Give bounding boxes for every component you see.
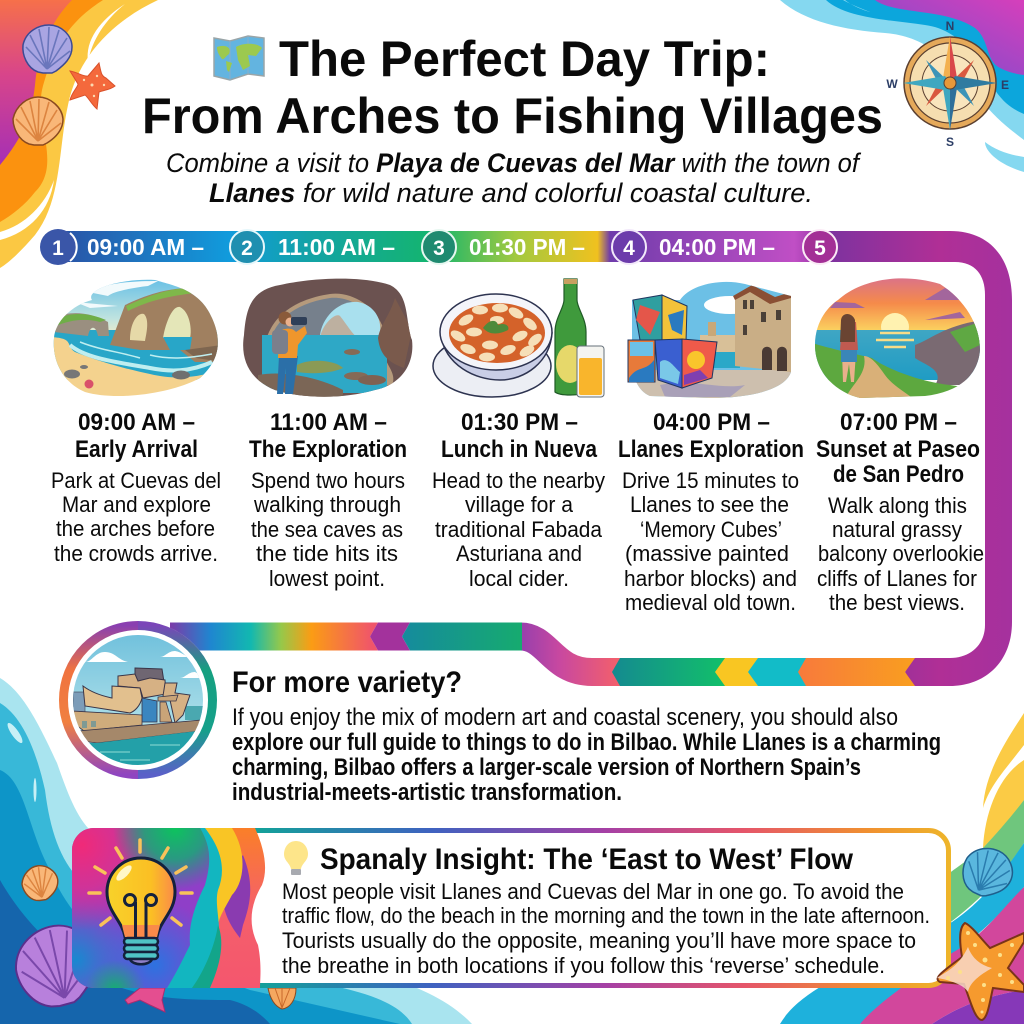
- step 4 text: Llanes to see the: [630, 492, 789, 517]
- step 3 text: Head to the nearby: [432, 468, 605, 493]
- step 4 text: medieval old town.: [625, 590, 796, 615]
- illustration: beach arches: [54, 280, 218, 396]
- step 1 marker and time: [40, 229, 204, 265]
- icon: world map: [214, 36, 264, 80]
- step 4 marker and time: 4: [623, 237, 635, 260]
- bulb: [89, 840, 192, 964]
- step 1 text: the arches before: [56, 516, 215, 541]
- step 1 text: Mar and explore: [62, 492, 211, 517]
- step 5 text: Walk along this: [828, 493, 967, 518]
- step 1 text: the crowds arrive.: [54, 541, 218, 566]
- icon: compass: N: [946, 19, 954, 33]
- step 2 text: lowest point.: [269, 566, 385, 591]
- insight body: the breathe in both locations if you follow this ‘reverse’ schedule.: [282, 953, 885, 978]
- text block: variety body: [232, 704, 941, 806]
- text block: variety body: If you enjoy the mix of modern art and coastal scenery, you should also: [232, 704, 898, 731]
- icon: small lightbulb: [284, 841, 308, 875]
- icon: purple seashell: [23, 25, 72, 73]
- heading: for more variety: For more variety?: [232, 666, 462, 699]
- step 4 text: (massive painted: [625, 541, 789, 566]
- step 2 text: The Exploration: [249, 436, 407, 463]
- step 5 text: natural grassy: [832, 517, 962, 542]
- icon: orange seashell: [13, 97, 63, 145]
- step 2 text: 11:00 AM –: [270, 409, 387, 436]
- step 4 text: Drive 15 minutes to: [622, 468, 799, 493]
- step 5 text: Sunset at Paseo: [816, 436, 980, 463]
- icon: compass: W: [886, 77, 898, 91]
- step 4 marker and time: 04:00 PM –: [659, 234, 775, 260]
- step 3 text: traditional Fabada: [435, 517, 603, 542]
- top-left wave decoration: [0, 0, 158, 268]
- step 2 text: the tide hits its: [256, 541, 398, 566]
- icon: large orange starfish: [937, 923, 1024, 1020]
- step 1 text: Early Arrival: [75, 436, 198, 463]
- bottom-left wave decoration: [0, 678, 472, 1024]
- subtitle: Combine a visit to Playa de Cuevas del Mar with the town of: [166, 148, 861, 178]
- bottom-right wave decoration: [780, 713, 1024, 1024]
- step 2 text: the sea caves as: [251, 517, 403, 542]
- step 5 text: balcony overlookie: [818, 541, 984, 566]
- step 4 text: [618, 409, 804, 615]
- icon: red starfish: [70, 63, 115, 109]
- step 2 marker and time: 2: [241, 237, 253, 260]
- icon: small bottom seashell: [268, 988, 296, 1009]
- step 2 marker and time: 11:00 AM –: [278, 234, 395, 260]
- subtitle: [166, 148, 861, 208]
- illustration: Bilbao museum in ring: [59, 621, 217, 779]
- title: The Perfect Day Trip:: [279, 31, 770, 87]
- step 1 marker and time: 09:00 AM –: [87, 234, 204, 260]
- insight body: traffic flow, do the beach in the morning and the town in the late afternoon.: [282, 903, 930, 928]
- step 4 text: harbor blocks) and: [624, 566, 797, 591]
- illustration: sea cave with photographer: [243, 278, 412, 397]
- step 1 text: [51, 409, 221, 566]
- step 4 text: ‘Memory Cubes’: [640, 517, 782, 542]
- step 5 text: the best views.: [829, 590, 965, 615]
- icon: compass: S: [946, 135, 954, 149]
- insight body: [282, 879, 930, 978]
- step 5 text: de San Pedro: [833, 461, 964, 488]
- illustration: sunset at the cliffs: [812, 275, 984, 400]
- illustration: painted memory cubes and old town: [628, 278, 795, 400]
- text block: variety body: charming, Bilbao offers a larger-scale version of Northern Spain’s: [232, 754, 861, 781]
- step 2 marker and time: [230, 230, 395, 264]
- insight heading: Spanaly Insight: The ‘East to West’ Flow: [320, 843, 854, 876]
- step 3 text: Lunch in Nueva: [441, 436, 598, 463]
- step 3 text: local cider.: [469, 566, 569, 591]
- top-right wave decoration: [780, 0, 1024, 172]
- icon: small orange seashell: [20, 863, 60, 903]
- icon panel: lightbulb: [72, 828, 265, 988]
- step 5 marker: 5: [814, 237, 826, 260]
- step 2 text: [249, 409, 407, 591]
- step 3 text: Asturiana and: [456, 541, 582, 566]
- step 5 marker: [803, 230, 837, 264]
- step 4 marker and time: [612, 230, 775, 264]
- insight body: Most people visit Llanes and Cuevas del Mar in one go. To avoid the: [282, 879, 904, 904]
- title: [142, 31, 883, 144]
- step 1 text: Park at Cuevas del: [51, 468, 221, 493]
- step 5 text: 07:00 PM –: [840, 409, 957, 436]
- step 3 marker and time: [422, 230, 585, 264]
- step 5 text: [816, 409, 984, 615]
- insight body: Tourists usually do the opposite, meaning you’ll have more space to: [282, 928, 916, 953]
- step 3 text: village for a: [465, 492, 574, 517]
- step 2 text: walking through: [253, 492, 401, 517]
- panel: Spanaly insight: [72, 828, 948, 988]
- step 1 marker and time: 1: [52, 237, 64, 260]
- step 3 text: 01:30 PM –: [461, 409, 578, 436]
- icon: blue seashell: [955, 840, 1020, 904]
- step 4 text: Llanes Exploration: [618, 436, 804, 463]
- icon: pink starfish: [125, 988, 165, 1012]
- step 2 text: Spend two hours: [251, 468, 405, 493]
- step 1 text: 09:00 AM –: [78, 409, 195, 436]
- icon: compass: [886, 19, 1009, 149]
- timeline track: [58, 231, 1012, 686]
- step 5 text: cliffs of Llanes for: [817, 566, 977, 591]
- title: From Arches to Fishing Villages: [142, 88, 883, 144]
- text block: variety body: industrial-meets-artistic transformation.: [232, 779, 622, 806]
- subtitle: Llanes for wild nature and colorful coastal culture.: [209, 178, 813, 208]
- step 3 marker and time: 01:30 PM –: [469, 234, 585, 260]
- icon: compass: E: [1001, 78, 1009, 92]
- icon: large purple seashell: [7, 917, 106, 1015]
- step 4 text: 04:00 PM –: [653, 409, 770, 436]
- step 3 text: [432, 409, 605, 591]
- illustration: fabada bowl, cider bottle and glass: [433, 279, 604, 397]
- step 3 marker and time: 3: [433, 237, 445, 260]
